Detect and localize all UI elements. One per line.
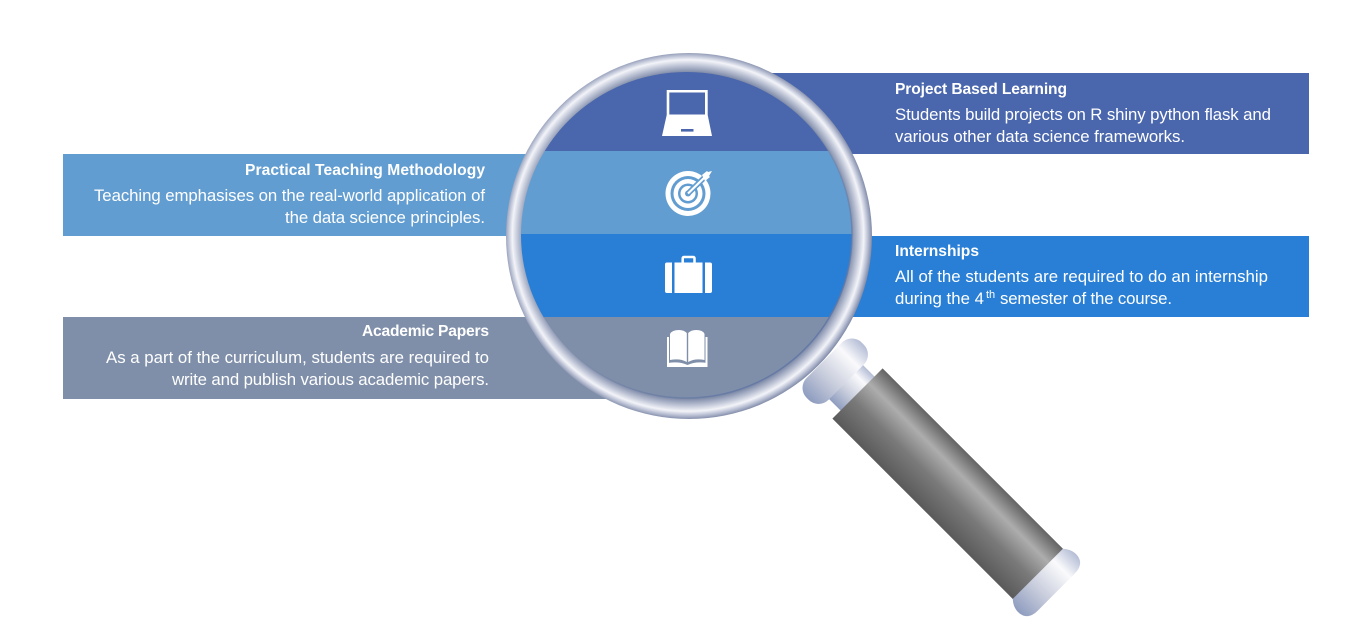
heading: Academic Papers: Academic Papers [362, 323, 489, 340]
text: Practical Teaching Methodology description: the data science principles. [285, 208, 485, 227]
text: Internships description: during the 4 [895, 289, 984, 308]
text: Practical Teaching Methodology description [94, 186, 485, 227]
icon: open book [668, 330, 707, 367]
magnifying glass lens [521, 72, 852, 357]
heading: Internships: Internships [895, 243, 979, 260]
text: Academic Papers description [106, 348, 489, 389]
panel: Internships [689, 236, 1309, 317]
panel: Practical Teaching Methodology [63, 154, 689, 236]
icon: laptop [662, 90, 712, 136]
text: Internships description: th [986, 289, 995, 301]
text: Internships description: semester of the course. [1000, 289, 1172, 308]
panel: Project Based Learning [689, 73, 1309, 154]
panel: Academic Papers [63, 317, 689, 399]
icon: briefcase [665, 257, 712, 293]
heading: Project Based Learning: Project Based Learning [895, 81, 1067, 98]
text: Practical Teaching Methodology description: Teaching emphasises on the real-world application of [94, 186, 485, 205]
text: Internships description [895, 267, 1268, 308]
text: Project Based Learning description: various other data science frameworks. [895, 127, 1185, 146]
text: Internships description: All of the students are required to do an internship [895, 267, 1268, 286]
text: Academic Papers description: write and publish various academic papers. [171, 370, 489, 389]
icon: target with arrow [666, 171, 712, 216]
magnifying glass ring [506, 53, 872, 419]
text: Project Based Learning description: Students build projects on R shiny python flask and [895, 105, 1271, 124]
text: Project Based Learning description [895, 105, 1271, 146]
magnifying glass handle [795, 331, 1085, 621]
heading: Practical Teaching Methodology: Practical Teaching Methodology [245, 162, 485, 179]
text: Academic Papers description: As a part of the curriculum, students are required to [106, 348, 489, 367]
